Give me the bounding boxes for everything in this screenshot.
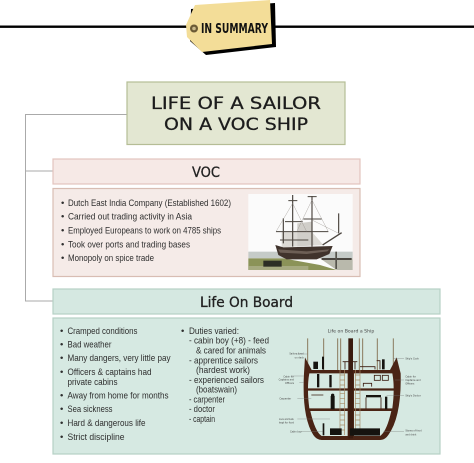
VOC bullet list: Took over ports and trading bases: [68, 240, 190, 250]
figures and cargo: [313, 357, 387, 436]
diagram title: Life on Board a Ship: [328, 329, 375, 334]
panel: VOC body: [53, 188, 360, 276]
callout labels: Officers: [405, 383, 415, 386]
panel: Life On Board body: [53, 318, 440, 454]
conditions bullet list: Officers & captains had: [68, 367, 152, 378]
callout labels: [279, 352, 422, 436]
VOC bullet list: •: [61, 253, 64, 264]
callout labels: Cabin for: [405, 375, 416, 378]
VOC bullet list: Dutch East India Company (Established 1602): [68, 198, 231, 209]
duties list: - cabin boy (+8) - feed: [189, 336, 269, 346]
duties list: Duties varied:: [189, 326, 239, 337]
duties list: - doctor: [189, 404, 215, 415]
callout labels: Captains and: [405, 379, 421, 382]
conditions bullet list: private cabins: [68, 377, 118, 388]
duties list: - apprentice sailors: [189, 356, 258, 366]
VOC bullet list: •: [61, 198, 64, 209]
VOC bullet list: •: [61, 212, 64, 222]
duties list: - captain: [189, 414, 215, 425]
hull: [304, 357, 401, 440]
callout labels: and drink: [405, 433, 417, 436]
duties list: (hardest work): [196, 365, 250, 376]
duties list: [181, 326, 269, 425]
VOC bullet list: [61, 198, 231, 264]
masts: [308, 338, 393, 370]
callout labels: Captains and: [279, 379, 295, 382]
VOC bullet list: Monopoly on spice trade: [68, 253, 154, 264]
conditions bullet list: •: [60, 326, 63, 337]
duties list: & cared for animals: [196, 346, 266, 356]
callout labels: Ship's Cook: [405, 357, 419, 360]
panel: VOC header: VOC: [192, 165, 220, 181]
conditions bullet list: Away from home for months: [68, 390, 169, 402]
VOC bullet list: Employed Europeans to work on 4785 ships: [68, 226, 221, 236]
panel: Life On Board header: Life On Board: [200, 295, 293, 311]
conditions bullet list: •: [60, 390, 63, 402]
callout labels: Cabin for: [283, 375, 294, 378]
callout labels: Sailors lived: [289, 352, 304, 355]
callout labels: kept for food: [279, 421, 294, 424]
diagram: life on board a ship: [279, 329, 422, 440]
VOC bullet list: Carried out trading activity in Asia: [68, 212, 193, 222]
photo: VOC ship: [248, 194, 353, 270]
conditions bullet list: Hard & dangerous life: [68, 418, 146, 429]
conditions bullet list: •: [60, 432, 63, 443]
top rule: [0, 26, 474, 28]
conditions bullet list: Cramped conditions: [68, 326, 138, 337]
callout labels: Stores of food: [405, 430, 422, 433]
tag: in summary: IN SUMMARY: [201, 21, 268, 37]
conditions bullet list: •: [60, 367, 63, 378]
ladders: [340, 370, 360, 435]
deck furniture: [311, 361, 388, 409]
tag: in summary: [186, 0, 276, 55]
title box: ON A VOC SHIP: [164, 115, 308, 135]
duties list: •: [181, 326, 184, 337]
conditions bullet list: •: [60, 418, 63, 429]
connector lines: [26, 114, 127, 301]
VOC bullet list: •: [61, 226, 64, 236]
callout labels: Carpenter: [279, 397, 291, 400]
duties list: (boatswain): [196, 384, 237, 396]
title box: LIFE OF A SAILOR: [151, 94, 321, 114]
duties list: - experienced sailors: [189, 375, 264, 386]
conditions bullet list: Strict discipline: [68, 432, 124, 443]
callout labels: Ship's Doctor: [405, 394, 421, 397]
central mast: [348, 338, 353, 438]
panel: Life On Board header: [53, 289, 440, 314]
leader lines: [292, 354, 404, 432]
title box: [127, 82, 345, 144]
VOC bullet list: •: [61, 240, 64, 250]
conditions bullet list: Bad weather: [68, 340, 112, 350]
conditions bullet list: [60, 326, 171, 443]
conditions bullet list: •: [60, 340, 63, 350]
panel: VOC header: [53, 159, 360, 184]
conditions bullet list: Sea sickness: [68, 404, 113, 415]
conditions bullet list: •: [60, 353, 63, 364]
callout labels: Officers: [285, 382, 295, 385]
callout labels: on deck: [295, 356, 304, 359]
conditions bullet list: •: [60, 404, 63, 415]
duties list: - carpenter: [189, 394, 225, 406]
callout labels: Live animals: [279, 418, 294, 421]
callout labels: Cabin boy: [290, 430, 302, 433]
conditions bullet list: Many dangers, very little pay: [68, 353, 171, 364]
